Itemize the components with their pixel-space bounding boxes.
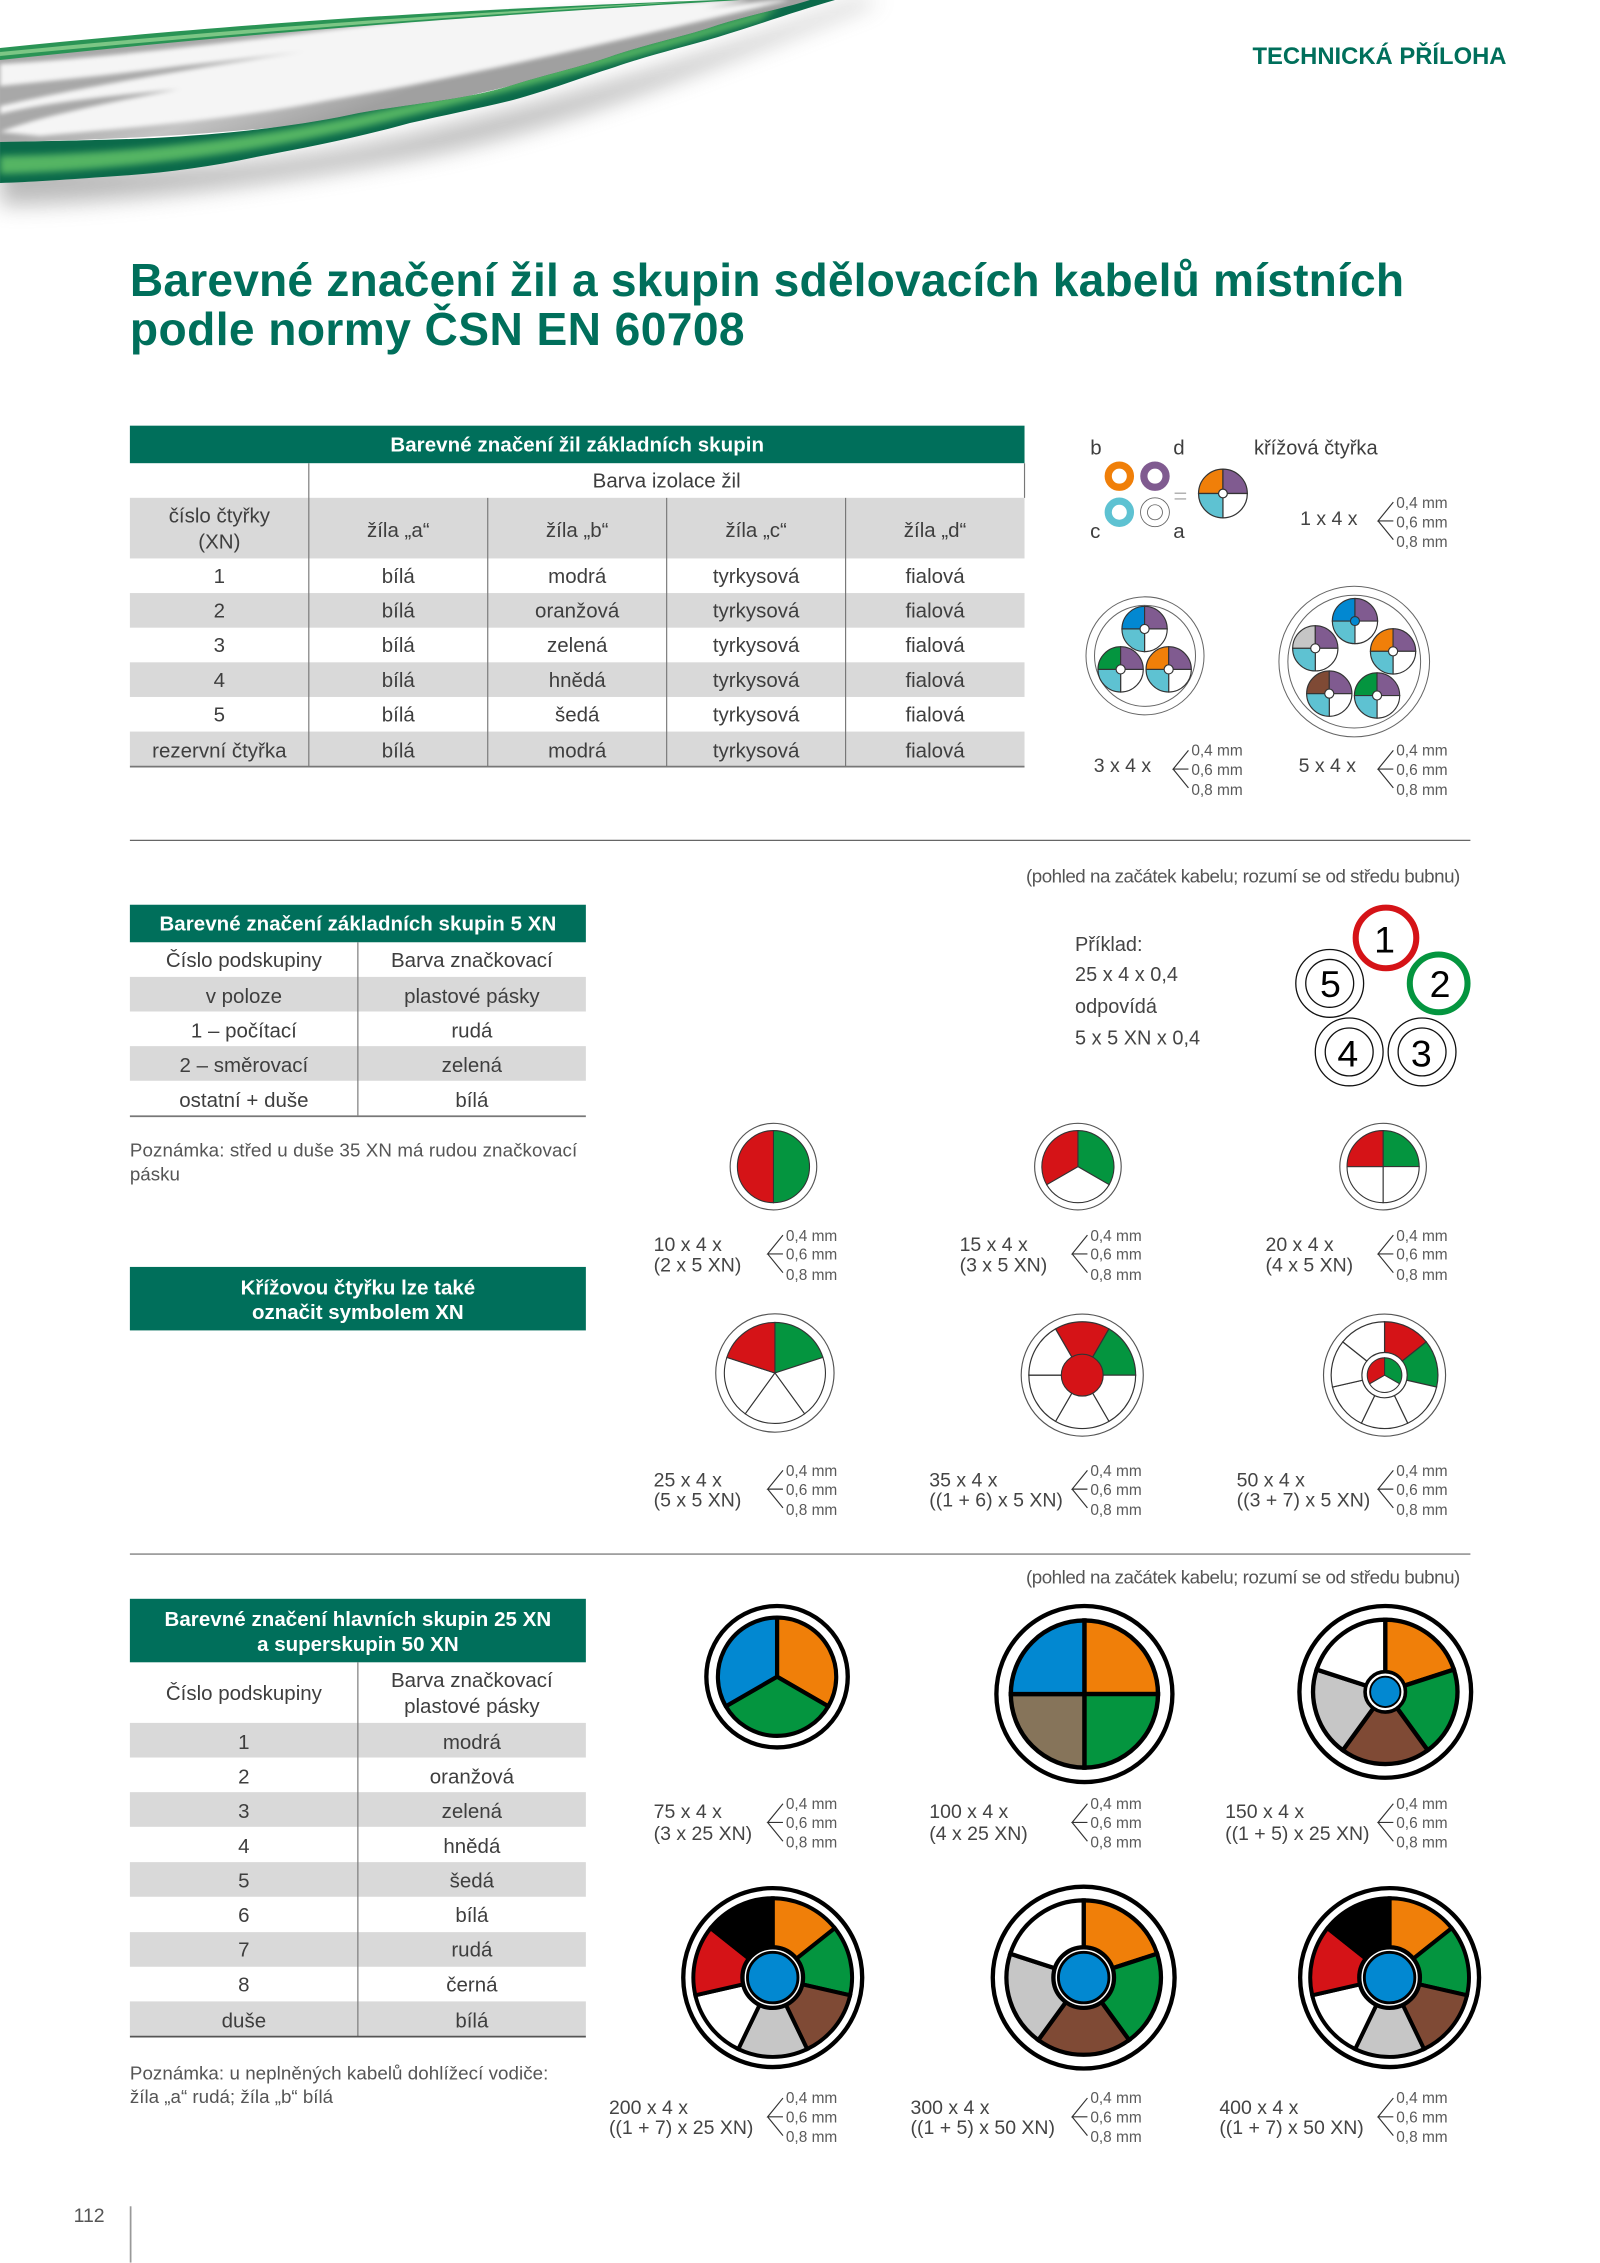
size label 5 x 4 x: 0,4 mm: [1396, 742, 1448, 759]
table: marking of basic groups 5 XN: ostatní + duše: [179, 1089, 309, 1112]
table: marking of main groups 25 XN and supergroups 50 XN: bílá: [455, 2009, 489, 2032]
table: marking of basic groups 5 XN: Číslo podskupiny: [166, 949, 323, 972]
table: marking of basic groups 5 XN: Barevné značení základních skupin 5 XN: [159, 913, 556, 936]
table: marking of main groups 25 XN and supergroups 50 XN: Barevné značení hlavních skupin 25 XN: [165, 1608, 551, 1631]
label 75 x 4: (3 x 25 XN): [654, 1823, 752, 1845]
label 50 x 4: 0,8 mm: [1396, 1502, 1448, 1519]
table: core colours of basic groups: 3: [214, 634, 225, 657]
label 75 x 4: [654, 1796, 837, 1852]
label 35 x 4: 35 x 4 x: [929, 1469, 998, 1491]
size label 3 x 4 x: 0,8 mm: [1191, 782, 1243, 799]
callout: XN symbol: označit symbolem XN: [252, 1301, 464, 1324]
table: marking of main groups 25 XN and supergroups 50 XN: Číslo podskupiny: [166, 1682, 323, 1705]
label 15 x 4: (3 x 5 XN): [960, 1254, 1047, 1276]
note under table 2: Poznámka: střed u duše 35 XN má rudou značkovací: [130, 1140, 578, 1161]
table: core colours of basic groups: tyrkysová: [713, 740, 800, 763]
table: marking of main groups 25 XN and supergroups 50 XN: 3: [238, 1800, 250, 1823]
table: core colours of basic groups: zelená: [547, 634, 608, 657]
table: marking of main groups 25 XN and supergroups 50 XN: 8: [238, 1973, 250, 1996]
table: marking of basic groups 5 XN: 2 – směrovací: [180, 1054, 309, 1077]
label 50 x 4: 50 x 4 x: [1237, 1469, 1305, 1491]
table: core colours of basic groups: fialová: [905, 703, 965, 726]
table: core colours of basic groups: fialová: [905, 600, 965, 623]
table: core colours of basic groups: 2: [214, 600, 225, 623]
table: marking of main groups 25 XN and supergroups 50 XN: černá: [446, 1973, 498, 1996]
table: core colours of basic groups: žíla „a“: [367, 519, 430, 542]
cable 75 x 4: [706, 1606, 848, 1747]
table: marking of main groups 25 XN and supergroups 50 XN: plastové pásky: [404, 1695, 540, 1718]
label 15 x 4: 15 x 4 x: [960, 1234, 1028, 1256]
table: core colours of basic groups: modrá: [548, 740, 607, 763]
diagram: crossed quad disc: [1199, 469, 1247, 518]
size label 3 x 4 x: [1094, 742, 1243, 799]
title: [130, 254, 1404, 355]
table: core colours of basic groups: rezervní čtyřka: [152, 740, 287, 763]
label 10 x 4: 0,4 mm: [786, 1228, 837, 1245]
table: core colours of basic groups: 1: [214, 565, 225, 588]
label 50 x 4: 0,4 mm: [1396, 1463, 1448, 1480]
diagram: crossed quad core rings: c: [1090, 520, 1100, 543]
table: core colours of basic groups: (XN): [198, 530, 240, 553]
label 25 x 4: 0,8 mm: [786, 1502, 837, 1519]
label 25 x 4: 0,4 mm: [786, 1463, 837, 1480]
table: marking of main groups 25 XN and supergroups 50 XN: modrá: [443, 1731, 502, 1754]
cable 400 x 4: [1300, 1888, 1479, 2067]
label 150 x 4: ((1 + 5) x 25 XN): [1225, 1823, 1370, 1845]
diagram: numbered groups example: 4: [1337, 1032, 1358, 1074]
label 300 x 4: 0,4 mm: [1090, 2090, 1142, 2107]
label 20 x 4: [1266, 1228, 1448, 1284]
example text: 5 x 5 XN x 0,4: [1075, 1028, 1200, 1050]
cable 200 x 4: [683, 1888, 862, 2067]
label: křížová čtyřka: křížová čtyřka: [1254, 438, 1378, 460]
cable 150 x 4: [1299, 1606, 1471, 1778]
size label 1 x 4 x: 0,6 mm: [1396, 514, 1448, 531]
size label 1 x 4 x: 1 x 4 x: [1300, 508, 1358, 530]
label 50 x 4: ((3 + 7) x 5 XN): [1237, 1489, 1370, 1511]
label 100 x 4: 0,8 mm: [1090, 1835, 1142, 1852]
label 25 x 4: [654, 1463, 837, 1519]
table: core colours of basic groups: modrá: [548, 565, 607, 588]
table: marking of main groups 25 XN and supergroups 50 XN: 6: [238, 1904, 250, 1927]
table: marking of main groups 25 XN and supergroups 50 XN: 4: [238, 1835, 250, 1858]
label 200 x 4: 200 x 4 x: [609, 2097, 688, 2119]
title: Barevné značení žil a skupin sdělovacích kabelů místních: [130, 254, 1404, 306]
label 150 x 4: 0,6 mm: [1396, 1815, 1448, 1832]
label 75 x 4: 0,4 mm: [786, 1796, 837, 1813]
table: core colours of basic groups: šedá: [555, 703, 600, 726]
table: marking of main groups 25 XN and supergroups 50 XN: bílá: [455, 1904, 489, 1927]
table: marking of main groups 25 XN and supergroups 50 XN: Barva značkovací: [391, 1669, 553, 1692]
example text: odpovídá: [1075, 996, 1158, 1018]
label 10 x 4: (2 x 5 XN): [654, 1254, 741, 1276]
table: core colours of basic groups: fialová: [905, 740, 965, 763]
diagram: crossed quad core rings: b: [1090, 437, 1102, 460]
label 10 x 4: 10 x 4 x: [654, 1234, 722, 1256]
table: marking of basic groups 5 XN: rudá: [451, 1019, 493, 1042]
table: marking of basic groups 5 XN: zelená: [442, 1054, 503, 1077]
table: marking of basic groups 5 XN: v poloze: [206, 985, 282, 1008]
label 15 x 4: 0,6 mm: [1090, 1247, 1142, 1264]
diagram: 5 x 4 cable: [1279, 586, 1430, 737]
note under table 2: pásku: [130, 1163, 180, 1184]
table: core colours of basic groups: 5: [214, 703, 225, 726]
table: core colours of basic groups: bílá: [382, 600, 415, 623]
label 100 x 4: (4 x 25 XN): [929, 1823, 1028, 1845]
table: marking of main groups 25 XN and supergroups 50 XN: zelená: [442, 1800, 503, 1823]
label 25 x 4: 25 x 4 x: [654, 1469, 722, 1491]
table: marking of main groups 25 XN and supergroups 50 XN: duše: [222, 2009, 266, 2032]
label 150 x 4: [1225, 1796, 1448, 1852]
diagram: numbered groups example: [1296, 908, 1468, 1086]
table: core colours of basic groups: bílá: [382, 703, 415, 726]
note under table 2: [130, 1140, 578, 1184]
diagram: crossed quad core rings: a: [1173, 520, 1185, 543]
label 10 x 4: 0,8 mm: [786, 1267, 837, 1284]
table: marking of main groups 25 XN and supergroups 50 XN: 7: [238, 1939, 250, 1962]
label 15 x 4: 0,4 mm: [1090, 1228, 1142, 1245]
example text: 25 x 4 x 0,4: [1075, 964, 1178, 986]
example text: Příklad:: [1075, 934, 1143, 956]
size label 1 x 4 x: 0,8 mm: [1396, 534, 1448, 551]
label 300 x 4: 0,8 mm: [1090, 2129, 1142, 2146]
table: core colours of basic groups: bílá: [382, 634, 415, 657]
table: core colours of basic groups: hnědá: [549, 669, 606, 692]
label 200 x 4: [609, 2090, 837, 2146]
size label 1 x 4 x: 0,4 mm: [1396, 495, 1448, 512]
label 15 x 4: [960, 1228, 1142, 1284]
table: core colours of basic groups: bílá: [382, 740, 415, 763]
example text: [1075, 934, 1200, 1050]
label 20 x 4: 0,4 mm: [1396, 1228, 1448, 1245]
label 200 x 4: 0,8 mm: [786, 2129, 837, 2146]
size label 5 x 4 x: 0,8 mm: [1396, 782, 1448, 799]
diagram: 3 x 4 cable: [1086, 597, 1204, 715]
size label 3 x 4 x: 3 x 4 x: [1094, 755, 1151, 777]
label 100 x 4: [929, 1796, 1142, 1852]
cable 10 x 4: [730, 1123, 817, 1210]
cable 100 x 4: [996, 1606, 1172, 1782]
table: core colours of basic groups: žíla „b“: [546, 519, 609, 542]
label 200 x 4: 0,6 mm: [786, 2110, 837, 2127]
size label 5 x 4 x: 0,6 mm: [1396, 762, 1448, 779]
note: cable view: (pohled na začátek kabelu; rozumí se od středu bubnu): [1026, 865, 1460, 886]
size label 3 x 4 x: 0,4 mm: [1191, 742, 1243, 759]
note under table 3: žíla „a“ rudá; žíla „b“ bílá: [130, 2086, 334, 2107]
table: marking of main groups 25 XN and supergroups 50 XN: 1: [238, 1731, 250, 1754]
label 300 x 4: 300 x 4 x: [911, 2097, 990, 2119]
table: core colours of basic groups: oranžová: [535, 600, 620, 623]
label 20 x 4: 20 x 4 x: [1266, 1234, 1334, 1256]
label 300 x 4: ((1 + 5) x 50 XN): [911, 2117, 1055, 2139]
table: marking of main groups 25 XN and supergroups 50 XN: 5: [238, 1869, 250, 1892]
diagram: numbered groups example: 2: [1430, 963, 1451, 1005]
table: core colours of basic groups: Barevné značení žil základních skupin: [390, 434, 764, 457]
label 35 x 4: 0,8 mm: [1090, 1502, 1142, 1519]
table: core colours of basic groups: tyrkysová: [713, 565, 800, 588]
label 35 x 4: 0,6 mm: [1090, 1482, 1142, 1499]
table: marking of main groups 25 XN and supergroups 50 XN: 2: [238, 1766, 250, 1789]
label 200 x 4: 0,4 mm: [786, 2090, 837, 2107]
table: core colours of basic groups: bílá: [382, 565, 415, 588]
size label 3 x 4 x: 0,6 mm: [1191, 762, 1243, 779]
label 50 x 4: [1237, 1463, 1448, 1519]
label 20 x 4: (4 x 5 XN): [1266, 1254, 1353, 1276]
label 400 x 4: ((1 + 7) x 50 XN): [1219, 2117, 1364, 2139]
table: core colours of basic groups: bílá: [382, 669, 415, 692]
diagram: numbered groups example: 1: [1374, 918, 1395, 960]
size label 5 x 4 x: 5 x 4 x: [1299, 755, 1356, 777]
cable 35 x 4: [1021, 1314, 1143, 1436]
label 75 x 4: 75 x 4 x: [654, 1801, 722, 1823]
table: core colours of basic groups: tyrkysová: [713, 669, 800, 692]
label 20 x 4: 0,8 mm: [1396, 1267, 1448, 1284]
table: marking of main groups 25 XN and supergroups 50 XN: [130, 1599, 586, 2037]
diagram: numbered groups example: 5: [1320, 963, 1341, 1005]
table: core colours of basic groups: fialová: [905, 634, 965, 657]
label 100 x 4: 100 x 4 x: [929, 1801, 1009, 1823]
title: podle normy ČSN EN 60708: [130, 303, 745, 355]
diagram: numbered groups example: 3: [1411, 1032, 1432, 1074]
label 75 x 4: 0,6 mm: [786, 1815, 837, 1832]
label 25 x 4: 0,6 mm: [786, 1482, 837, 1499]
table: core colours of basic groups: fialová: [905, 669, 965, 692]
label 15 x 4: 0,8 mm: [1090, 1267, 1142, 1284]
table: core colours of basic groups: tyrkysová: [713, 703, 800, 726]
size label 1 x 4 x: [1300, 495, 1448, 551]
label 300 x 4: 0,6 mm: [1090, 2110, 1142, 2127]
cable 300 x 4: [993, 1887, 1175, 2068]
section label: TECHNICKÁ PŘÍLOHA: [1253, 42, 1506, 70]
table: marking of basic groups 5 XN: Barva značkovací: [391, 949, 553, 972]
table: core colours of basic groups: 4: [214, 669, 225, 692]
label 200 x 4: ((1 + 7) x 25 XN): [609, 2117, 753, 2139]
label 300 x 4: [911, 2090, 1142, 2146]
cable 50 x 4: [1324, 1314, 1446, 1436]
label 400 x 4: 0,8 mm: [1396, 2129, 1448, 2146]
size label 5 x 4 x: [1299, 742, 1448, 799]
table: core colours of basic groups: Barva izolace žil: [593, 470, 741, 493]
diagram: crossed quad core rings: d: [1173, 437, 1185, 460]
table: marking of main groups 25 XN and supergroups 50 XN: a superskupin 50 XN: [257, 1633, 459, 1656]
label 150 x 4: 0,8 mm: [1396, 1835, 1448, 1852]
table: core colours of basic groups: fialová: [905, 565, 965, 588]
callout: XN symbol: [130, 1267, 586, 1330]
table: marking of basic groups 5 XN: [130, 905, 586, 1116]
table: core colours of basic groups: číslo čtyřky: [169, 504, 271, 527]
table: marking of basic groups 5 XN: 1 – počítací: [191, 1019, 297, 1042]
label 150 x 4: 0,4 mm: [1396, 1796, 1448, 1813]
table: core colours of basic groups: tyrkysová: [713, 600, 800, 623]
label 10 x 4: 0,6 mm: [786, 1247, 837, 1264]
label 100 x 4: 0,6 mm: [1090, 1815, 1142, 1832]
label 35 x 4: [929, 1463, 1142, 1519]
table: marking of basic groups 5 XN: plastové pásky: [404, 985, 540, 1008]
thick green strand: [0, 0, 850, 190]
note under table 3: Poznámka: u neplněných kabelů dohlížecí vodiče:: [130, 2062, 548, 2083]
callout: XN symbol: Křížovou čtyřku lze také: [241, 1276, 475, 1299]
label 400 x 4: 0,6 mm: [1396, 2110, 1448, 2127]
page number: 112: [74, 2205, 105, 2227]
table: core colours of basic groups: žíla „d“: [904, 519, 967, 542]
header image: twisted cable strands: [0, 0, 880, 205]
label 50 x 4: 0,6 mm: [1396, 1482, 1448, 1499]
label 35 x 4: 0,4 mm: [1090, 1463, 1142, 1480]
label 75 x 4: 0,8 mm: [786, 1835, 837, 1852]
label 400 x 4: [1219, 2090, 1448, 2146]
cable 15 x 4: [1035, 1123, 1121, 1210]
table: marking of main groups 25 XN and supergroups 50 XN: hnědá: [443, 1835, 501, 1858]
table: marking of main groups 25 XN and supergroups 50 XN: rudá: [451, 1939, 493, 1962]
label 100 x 4: 0,4 mm: [1090, 1796, 1142, 1813]
cable 25 x 4: [716, 1314, 834, 1432]
label 400 x 4: 0,4 mm: [1396, 2090, 1448, 2107]
label 400 x 4: 400 x 4 x: [1219, 2097, 1299, 2119]
diagram: crossed quad core rings: [1090, 437, 1186, 543]
table: marking of main groups 25 XN and supergroups 50 XN: oranžová: [430, 1766, 515, 1789]
label 25 x 4: (5 x 5 XN): [654, 1489, 741, 1511]
label 35 x 4: ((1 + 6) x 5 XN): [929, 1489, 1063, 1511]
cable 20 x 4: [1340, 1123, 1426, 1210]
label 20 x 4: 0,6 mm: [1396, 1247, 1448, 1264]
table: core colours of basic groups: [130, 426, 1025, 767]
note under table 3: [130, 2062, 548, 2107]
label 150 x 4: 150 x 4 x: [1225, 1801, 1304, 1823]
table: core colours of basic groups: žíla „c“: [725, 519, 787, 542]
note: cable view 2: (pohled na začátek kabelu; rozumí se od středu bubnu): [1026, 1567, 1460, 1588]
table: marking of basic groups 5 XN: bílá: [455, 1089, 489, 1112]
table: core colours of basic groups: tyrkysová: [713, 634, 800, 657]
table: marking of main groups 25 XN and supergroups 50 XN: šedá: [450, 1869, 495, 1892]
label 10 x 4: [654, 1228, 837, 1284]
